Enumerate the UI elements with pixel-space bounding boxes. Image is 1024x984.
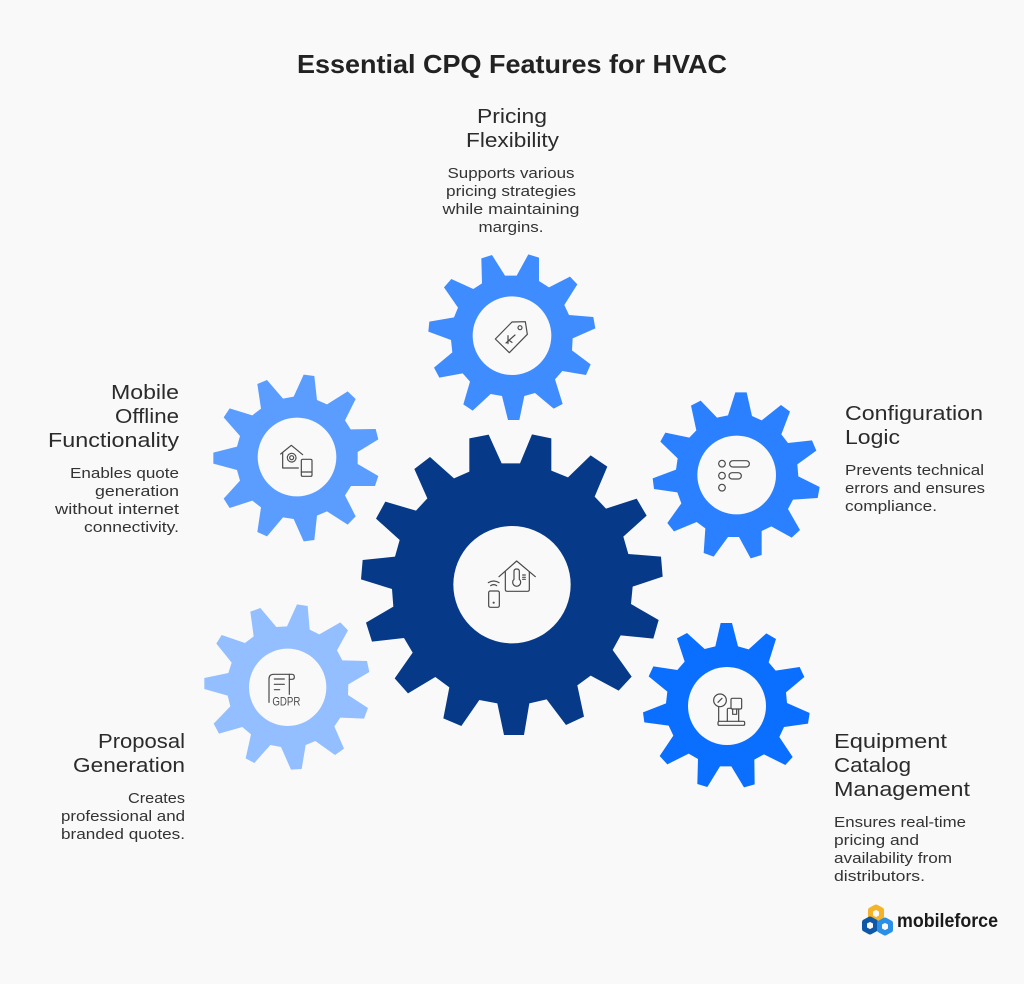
text: equipment catalog management: Equipment [834, 730, 947, 753]
text: equipment catalog management: availability from [834, 850, 952, 867]
text: proposal generation: branded quotes. [61, 826, 185, 843]
gear: proposal generation [204, 604, 369, 770]
text: equipment catalog management: distributors. [834, 868, 925, 885]
icon: logic options list [719, 460, 749, 491]
text: mobile offline functionality: Mobile [111, 381, 179, 404]
logo: mobileforce [864, 907, 998, 933]
gear: mobile offline functionality [213, 375, 378, 541]
text: equipment catalog management [834, 730, 970, 885]
text: proposal generation: Creates [128, 790, 185, 807]
text: proposal generation: Generation [73, 754, 185, 777]
text: configuration logic: Logic [845, 426, 900, 449]
text: mobile offline functionality [48, 381, 180, 536]
central gear [361, 434, 663, 735]
text: mobile offline functionality: Enables quote [70, 465, 179, 482]
text: mobile offline functionality: connectivity. [84, 519, 179, 536]
gear: equipment catalog management [643, 623, 810, 787]
text: equipment catalog management: Ensures real-time [834, 814, 966, 831]
text: proposal generation: professional and [61, 808, 185, 825]
text: configuration logic: compliance. [845, 498, 937, 515]
text: pricing flexibility: pricing strategies [446, 183, 576, 200]
text: pricing flexibility: Flexibility [466, 129, 560, 152]
text: mobile offline functionality: generation [95, 483, 179, 500]
text: proposal generation: Proposal [98, 730, 185, 753]
gear: pricing flexibility [428, 254, 595, 420]
text: pricing flexibility [441, 105, 580, 236]
icon: logo hexagons [864, 907, 890, 933]
text: pricing flexibility: Pricing [477, 105, 547, 128]
title: Essential CPQ Features for HVAC [297, 49, 727, 79]
text: configuration logic: Prevents technical [845, 462, 984, 479]
icon: scale with boxes [714, 694, 745, 725]
icon: price tag [495, 322, 527, 353]
gear: configuration logic [653, 392, 820, 558]
text: mobile offline functionality: Offline [115, 405, 179, 428]
text: proposal generation [61, 730, 185, 843]
icon: house with gear and phone [281, 445, 312, 476]
text: configuration logic: Configuration [845, 402, 983, 425]
logo: mobileforce: mobileforce [897, 911, 998, 932]
text: equipment catalog management: Catalog [834, 754, 911, 777]
text: equipment catalog management: pricing and [834, 832, 919, 849]
text: mobile offline functionality: without internet [54, 501, 180, 518]
text: pricing flexibility: while maintaining [441, 201, 580, 218]
text: mobile offline functionality: Functionality [48, 429, 180, 452]
icon: smart home thermostat [488, 561, 535, 607]
text: configuration logic: errors and ensures [845, 480, 985, 497]
icon: GDPR document: GDPR [272, 694, 301, 708]
text: equipment catalog management: Management [834, 778, 970, 801]
text: configuration logic [845, 402, 985, 515]
icon: GDPR document [269, 674, 301, 708]
text: pricing flexibility: margins. [478, 219, 544, 236]
text: pricing flexibility: Supports various [448, 165, 574, 182]
